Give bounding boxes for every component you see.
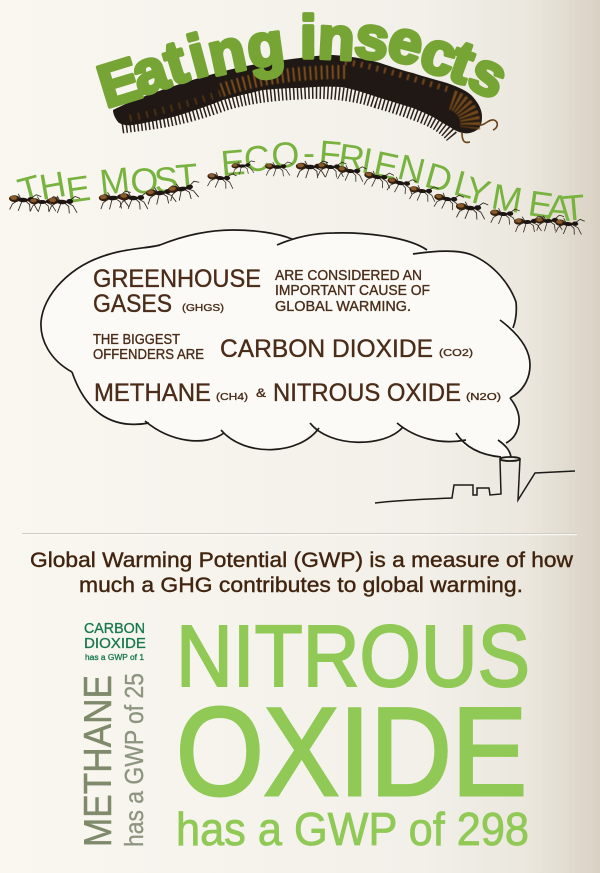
label: nitrous oxide GWP: has a GWP of 298 bbox=[176, 803, 529, 855]
icon: ants marching bbox=[8, 161, 585, 235]
text block: greenhouse gases: (GHGS) bbox=[182, 302, 224, 314]
text block: biggest offenders: OFFENDERS ARE bbox=[93, 347, 204, 363]
text block: GWP definition: much a GHG contributes to global warming. bbox=[79, 574, 523, 597]
text block: greenhouse gases: IMPORTANT CAUSE OF bbox=[275, 282, 430, 299]
text block: greenhouse gases: GLOBAL WARMING. bbox=[275, 298, 411, 315]
text block: methane and nitrous oxide: NITROUS OXIDE bbox=[273, 379, 461, 407]
text block: biggest offenders bbox=[93, 332, 473, 363]
text block: methane and nitrous oxide: & bbox=[256, 386, 266, 400]
text block: GWP definition bbox=[30, 549, 574, 597]
label: carbon dioxide GWP: DIOXIDE bbox=[84, 635, 146, 652]
text block: greenhouse gases: GREENHOUSE bbox=[93, 265, 261, 293]
label: carbon dioxide GWP: has a GWP of 1 bbox=[85, 652, 144, 662]
label: nitrous oxide GWP: NITROUS bbox=[176, 608, 530, 705]
label: methane GWP bbox=[77, 673, 149, 847]
text block: greenhouse gases: ARE CONSIDERED AN bbox=[275, 267, 422, 284]
text block: methane and nitrous oxide: (N2O) bbox=[466, 391, 501, 403]
label: nitrous oxide GWP bbox=[176, 608, 530, 855]
label: methane GWP: has a GWP of 25 bbox=[119, 673, 149, 847]
text block: biggest offenders: THE BIGGEST bbox=[93, 332, 180, 348]
title: Eating insects bbox=[90, 3, 518, 120]
text block: greenhouse gases: GASES bbox=[93, 290, 172, 318]
panel: smoke cloud bbox=[41, 230, 530, 457]
label: methane GWP: METHANE bbox=[77, 675, 120, 847]
icon: millipede bbox=[113, 55, 497, 142]
text block: biggest offenders: (CO2) bbox=[439, 347, 473, 359]
text block: methane and nitrous oxide: METHANE bbox=[94, 379, 211, 407]
label: nitrous oxide GWP: OXIDE bbox=[176, 683, 527, 822]
text block: GWP definition: Global Warming Potential (GWP) is a measure of how bbox=[30, 549, 574, 572]
label: carbon dioxide GWP: CARBON bbox=[84, 620, 145, 637]
icon: factory chimney bbox=[375, 457, 575, 503]
text block: methane and nitrous oxide bbox=[94, 379, 501, 407]
text block: greenhouse gases bbox=[93, 265, 430, 318]
text block: biggest offenders: CARBON DIOXIDE bbox=[220, 335, 433, 363]
subtitle: THE MOST ECO-FRIENDLY MEAT bbox=[13, 132, 587, 229]
label: carbon dioxide GWP bbox=[84, 620, 146, 662]
text block: methane and nitrous oxide: (CH4) bbox=[216, 391, 248, 403]
